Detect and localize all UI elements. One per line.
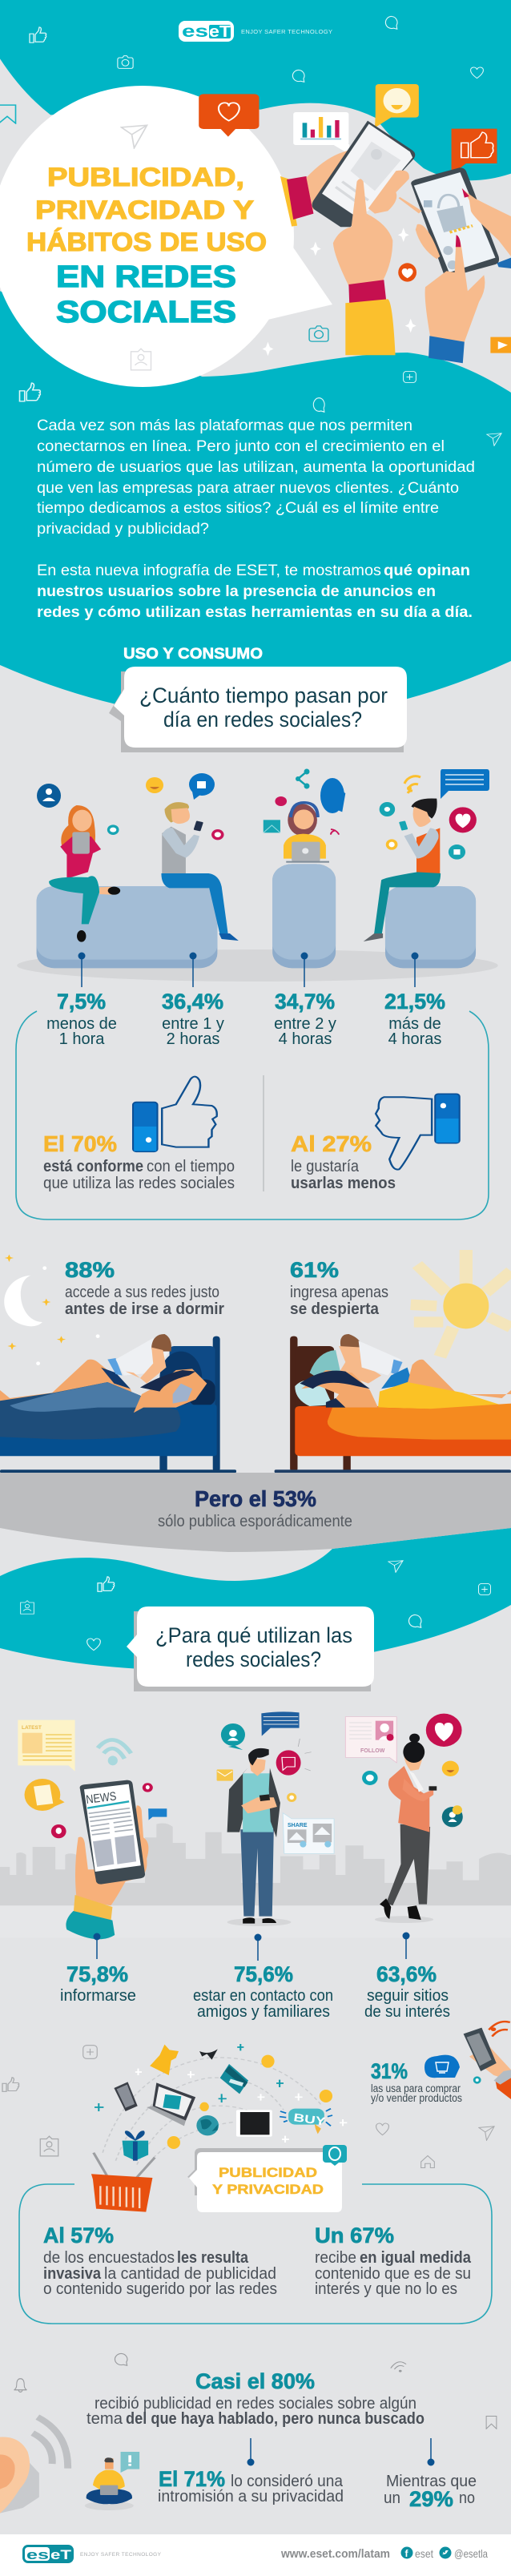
- icon row above characters: [37, 769, 489, 813]
- icon: yellow news bubble: [25, 1779, 65, 1811]
- pins: [78, 953, 418, 987]
- logo: ESET header: ENJOY SAFER TECHNOLOGY: [241, 28, 332, 35]
- stat: seguir sitios: seguir sitios: [367, 1987, 449, 2005]
- callout: cuánto tiempo: día en redes sociales?: [163, 707, 362, 732]
- hero illustration: hands and phones: [199, 84, 511, 363]
- floating icons near characters: [107, 789, 477, 860]
- stat: more than four hours: 4 horas: [388, 1030, 441, 1048]
- latest label: LATEST: [22, 1725, 42, 1731]
- illustration: online shopping: [91, 2044, 347, 2212]
- stat: 57 percent invasive: invasiva: [43, 2265, 102, 2283]
- stat: 71 percent intrusion: El 71%: [159, 2467, 225, 2491]
- icon: tablet: [236, 2110, 272, 2137]
- stat: almost 80 percent: [87, 2369, 424, 2428]
- stat: 61 percent on waking: se despierta: [290, 1300, 380, 1318]
- stat: 70 percent satisfied: está conforme: [43, 1158, 143, 1175]
- icon: phone: [114, 2082, 138, 2111]
- stat: 57 percent invasive: [43, 2223, 277, 2298]
- icons: around woman: [345, 1714, 463, 1827]
- stat: 29 percent not: 29%: [409, 2487, 453, 2511]
- teal section two background: [0, 1528, 511, 1671]
- stat: 88 percent before sleep: antes de irse a dormir: [65, 1300, 224, 1318]
- callout: para qué: [127, 1606, 374, 1691]
- chart: time on social networks: [17, 769, 498, 1048]
- stat: 71 percent intrusion: lo consideró una: [231, 2473, 344, 2490]
- intro text: nuestros usuarios sobre la presencia de anuncios en: [37, 583, 436, 600]
- stat: 71 percent intrusion: intromisión a su privacidad: [158, 2488, 344, 2505]
- stat: 67 percent mixed content: recibe: [315, 2249, 356, 2267]
- pointing hand right: [425, 188, 485, 363]
- sparkles and plus marks: [95, 2044, 347, 2143]
- stat: 61 percent on waking: 61%: [290, 1258, 339, 1282]
- callout: para qué: ¿Para qué utilizan las: [155, 1623, 352, 1647]
- stat: 67 percent mixed content: en igual medida: [360, 2249, 472, 2267]
- stat: 29 percent not: un: [384, 2489, 400, 2507]
- stat: 67 percent mixed content: interés y que no lo es: [315, 2280, 457, 2298]
- character: woman with tablet: [49, 805, 120, 942]
- intro text: tiempo dedicamos a estos sitios? ¿Cuál es el límite entre: [37, 500, 439, 517]
- footer logo: eT: [50, 2547, 72, 2562]
- stat: 61 percent on waking: ingresa apenas: [290, 1284, 388, 1301]
- icon: paper plane: [121, 125, 147, 148]
- icon: ear and sound waves: [0, 2417, 68, 2514]
- stat: informarse: informarse: [60, 1987, 136, 2005]
- character: woman with laptop: [284, 803, 329, 863]
- stat: 57 percent invasive: o contenido sugerido por las redes: [43, 2280, 277, 2298]
- illustration: person with laptop: [85, 2452, 139, 2510]
- character: man with phone: [364, 798, 441, 941]
- icons: lower grey outline icons: [14, 2353, 497, 2429]
- icon: dress: [150, 2045, 179, 2075]
- stat: more than four hours: más de: [388, 1015, 441, 1033]
- footer social links: f: [405, 2548, 408, 2559]
- callout: cuánto tiempo: ¿Cuánto tiempo pasan por: [139, 683, 388, 707]
- intro text: Cada vez son más las plataformas que nos permiten: [37, 417, 412, 434]
- news label: NEWS: [85, 1789, 117, 1807]
- stat: seguir sitios: 63,6%: [376, 1962, 437, 1986]
- footer social links: @esetla: [454, 2547, 488, 2560]
- intro text: número de usuarios que las utilizan, aumenta la oportunidad: [37, 459, 475, 476]
- card: latest: [18, 1720, 75, 1772]
- pins: privacy: [247, 2438, 434, 2465]
- hand: [66, 1805, 148, 1939]
- icons: white outline social icons: [19, 16, 501, 445]
- intro text: redes y cómo utilizan estas herramientas en su día a día.: [37, 604, 473, 621]
- dashed arcs: [103, 2058, 321, 2165]
- hand holding right phone: [399, 188, 511, 268]
- stat: 57 percent invasive: les resulta: [177, 2249, 249, 2267]
- stat: 31 percent buy or sell: las usa para comprar: [371, 2082, 461, 2094]
- stat: more than four hours: [384, 990, 445, 1048]
- coins: [167, 2055, 332, 2149]
- title: EN REDES: [56, 260, 236, 294]
- teal header background: [0, 0, 511, 720]
- buy label: BUY: [293, 2110, 327, 2128]
- stat: almost 80 percent: del que haya hablado, pero nunca buscado: [126, 2410, 424, 2428]
- stat: 27 percent want less: le gustaría: [291, 1158, 360, 1175]
- share label: SHARE: [288, 1823, 308, 1828]
- stat: less than one hour: menos de: [46, 1015, 117, 1033]
- icon: id card: [131, 349, 151, 370]
- icon: bookmark at left edge: [0, 105, 16, 123]
- character: man sitting: [161, 802, 239, 941]
- icon: orange like bubble: [452, 129, 497, 175]
- phone: left: [312, 121, 415, 227]
- stat: 67 percent mixed content: [315, 2223, 472, 2298]
- stat: 61 percent on waking: [290, 1258, 388, 1318]
- intro text: En esta nueva infografía de ESET, te mostramos: [37, 562, 381, 579]
- stat: one to two hours: 2 horas: [167, 1030, 219, 1048]
- stat: 29 percent not: no: [459, 2489, 475, 2507]
- intro text: [37, 417, 475, 621]
- icon: globe: [196, 2115, 219, 2135]
- icons: grey outline icons: [2, 2046, 494, 2168]
- stat: 71 percent intrusion: [158, 2467, 344, 2505]
- stat: almost 80 percent: recibió publicidad en redes sociales sobre algún: [95, 2395, 416, 2413]
- speech bubble: title background: [0, 86, 332, 387]
- icon: sun: [411, 1250, 511, 1357]
- stat: one to two hours: [162, 990, 224, 1048]
- icon: thumbs down: [376, 1094, 460, 1170]
- panel: advertising outline: [19, 2184, 492, 2324]
- illustration: morning bed: [275, 1334, 511, 1473]
- stat: 70 percent satisfied: que utiliza las redes sociales: [43, 1175, 235, 1192]
- logo: ESET header: es: [182, 22, 208, 41]
- footer tagline: ENJOY SAFER TECHNOLOGY: [80, 2552, 162, 2558]
- stat: less than one hour: 7,5%: [57, 990, 106, 1014]
- intro text: conectarnos en línea. Pero junto con el crecimiento en el: [37, 438, 445, 455]
- stat: 70 percent satisfied: con el tiempo: [147, 1158, 235, 1175]
- stat: two to four hours: [274, 990, 336, 1048]
- stat: one to two hours: entre 1 y: [162, 1015, 224, 1033]
- stat: almost 80 percent: tema: [87, 2410, 123, 2428]
- stat: contacto: [193, 1962, 333, 2021]
- stat: 70 percent satisfied: El 70%: [43, 1131, 117, 1156]
- title: HÁBITOS DE USO: [26, 228, 267, 256]
- pins: section two: [94, 1933, 409, 1961]
- icon: wifi: [98, 1740, 131, 1765]
- icon: video play: [490, 337, 511, 353]
- icon: smiley bubble: [375, 84, 419, 127]
- icon: buy button: [280, 2109, 332, 2134]
- stat: 88 percent before sleep: accede a sus redes justo: [65, 1284, 219, 1301]
- band: publishing stat: [0, 1473, 511, 1552]
- illustration: hand with phone: [464, 2022, 511, 2099]
- pointing hand: [333, 179, 396, 355]
- stat: 88 percent before sleep: 88%: [65, 1258, 115, 1282]
- seats: [17, 864, 498, 982]
- band: publishing stat: Pero el 53%: [195, 1486, 316, 1511]
- stat: 57 percent invasive: la cantidad de publicidad: [104, 2265, 276, 2283]
- stat: 29 percent not: [384, 2473, 477, 2511]
- callout: para qué: redes sociales?: [186, 1647, 321, 1671]
- icons: bulbs and chat: [51, 1783, 167, 1838]
- phone: news: [80, 1780, 145, 1885]
- stat: seguir sitios: de su interés: [364, 2003, 450, 2021]
- illustration: informarse: [18, 1720, 167, 1939]
- skyline and ground: [0, 1824, 511, 1937]
- stat: 88 percent before sleep: [65, 1258, 224, 1318]
- icon: heel: [199, 2049, 218, 2060]
- stat: 31 percent buy or sell: y/o vender productos: [371, 2092, 462, 2104]
- follow label: FOLLOW: [360, 1748, 385, 1754]
- icon: shopping cart bubble: [424, 2055, 460, 2078]
- logo: ESET header: [179, 21, 332, 42]
- callout: publicidad y privacidad: [187, 2148, 342, 2212]
- stat: informarse: [60, 1962, 136, 2005]
- intro text: privacidad y publicidad?: [37, 521, 209, 538]
- icon: camera outline teal: [309, 326, 328, 341]
- stat: contacto: estar en contacto con: [193, 1987, 333, 2005]
- stat: 31 percent buy or sell: [371, 2059, 462, 2104]
- footer logo: [22, 2545, 74, 2563]
- footer social links: eset: [415, 2547, 433, 2560]
- illustration: night bed: [0, 1334, 236, 1473]
- stat: 29 percent not: Mientras que: [386, 2473, 477, 2490]
- title: SOCIALES: [56, 296, 236, 329]
- stat: one to two hours: 36,4%: [162, 990, 223, 1014]
- phone: right: [411, 167, 499, 276]
- icon: heart badge: [398, 263, 416, 282]
- callout: publicidad y privacidad: Y PRIVACIDAD: [212, 2182, 324, 2197]
- stat: contacto: 75,6%: [234, 1962, 293, 1986]
- illustration: man with phone: [227, 1748, 291, 1926]
- illustration: woman with phone: [375, 1734, 437, 1923]
- stat: almost 80 percent: Casi el 80%: [195, 2369, 315, 2393]
- footer: [0, 2534, 511, 2576]
- panel: satisfaction outline: [16, 1011, 489, 1219]
- stat: two to four hours: entre 2 y: [274, 1015, 336, 1033]
- stat: 27 percent want less: usarlas menos: [291, 1175, 396, 1192]
- footer logo: es: [26, 2547, 49, 2562]
- night scene: moon and stars: [4, 1255, 100, 1365]
- stat: 67 percent mixed content: Un 67%: [315, 2223, 394, 2247]
- callout: publicidad y privacidad: PUBLICIDAD: [219, 2165, 317, 2180]
- icon: teal chat badge: [323, 2145, 347, 2166]
- stat: more than four hours: 21,5%: [384, 990, 445, 1014]
- stat: 67 percent mixed content: contenido que es de su: [315, 2265, 471, 2283]
- footer website: www.eset.com/latam: [280, 2547, 390, 2561]
- sparkles: [263, 228, 416, 356]
- title: PUBLICIDAD,: [47, 163, 244, 191]
- icons: section two outline icons: [21, 1561, 490, 1651]
- title: [26, 163, 267, 329]
- title: PRIVACIDAD Y: [35, 196, 254, 224]
- hero illustration backdrop: [0, 58, 511, 393]
- icon: thumbs up: [133, 1077, 217, 1151]
- intro text: que ven las empresas para atraer nuevos clientes. ¿Cuánto: [37, 480, 459, 497]
- section label: uso y consumo: USO Y CONSUMO: [123, 646, 263, 663]
- stat: 31 percent buy or sell: 31%: [371, 2059, 408, 2083]
- intro text: qué opinan: [384, 562, 470, 579]
- stat: less than one hour: 1 hora: [59, 1030, 105, 1048]
- stat: seguir sitios: [364, 1962, 450, 2021]
- stat: two to four hours: 4 horas: [279, 1030, 332, 1048]
- icon: credit card: [220, 2064, 248, 2094]
- basket: [91, 2153, 155, 2212]
- logo: ESET header: eT: [209, 23, 231, 41]
- stat: 57 percent invasive: de los encuestados: [43, 2249, 175, 2267]
- icon: gift: [123, 2131, 148, 2161]
- chart card: [293, 112, 349, 155]
- icons: around man: [217, 1711, 334, 1853]
- band: publishing stat: sólo publica esporádicamente: [158, 1513, 352, 1530]
- footer social links: [400, 2546, 488, 2560]
- stat: 27 percent want less: Al 27%: [291, 1131, 372, 1156]
- stat: 57 percent invasive: Al 57%: [43, 2223, 114, 2247]
- stat: two to four hours: 34,7%: [275, 990, 335, 1014]
- stat: contacto: amigos y familiares: [197, 2003, 330, 2021]
- stat: less than one hour: [46, 990, 117, 1048]
- icon: orange heart bubble: [199, 94, 259, 137]
- stat: 27 percent want less: [291, 1131, 396, 1192]
- left arm: [280, 146, 362, 227]
- callout: cuánto tiempo: [109, 667, 407, 752]
- icon: laptop: [147, 2082, 195, 2126]
- stat: 70 percent satisfied: [43, 1131, 235, 1192]
- right fingers of left hand: [368, 171, 409, 214]
- stat: informarse: 75,8%: [66, 1962, 128, 1986]
